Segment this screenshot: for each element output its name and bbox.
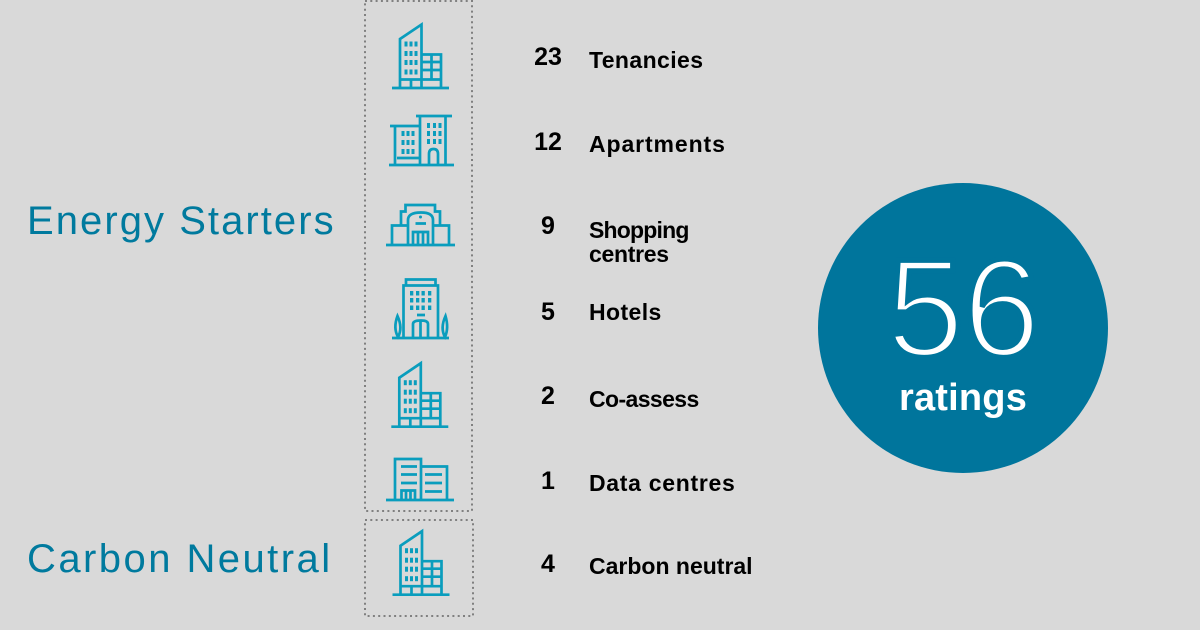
total number: 56 [887, 231, 1039, 386]
heading: Carbon Neutral: Carbon Neutral [27, 537, 333, 581]
stat: 4 Carbon neutral: 4 [541, 550, 555, 578]
stat: 23 Tenancies: Tenancies [589, 47, 703, 73]
stat: 9 Shopping centres [541, 212, 689, 267]
total label: ratings [899, 377, 1027, 419]
stat: 23 Tenancies: 23 [534, 43, 562, 71]
stat: 12 Apartments: 12 [534, 128, 562, 156]
dotted box: Energy Starters [365, 1, 472, 511]
stat: 2 Co-assess: 2 [541, 382, 555, 410]
stat: 9 Shopping centres: centres [589, 241, 669, 267]
stat: 4 Carbon neutral [541, 550, 753, 579]
icon: tenancies building [392, 24, 449, 88]
stat: 5 Hotels: Hotels [589, 299, 662, 325]
heading: Energy Starters: Energy Starters [27, 199, 336, 243]
icon: carbon neutral building [392, 531, 450, 595]
stat: 4 Carbon neutral: Carbon neutral [589, 553, 753, 579]
dotted box: Carbon Neutral [365, 520, 473, 616]
stat: 5 Hotels: 5 [541, 298, 555, 326]
stat: 2 Co-assess: Co-assess [589, 386, 699, 412]
total circle: 56 ratings [818, 183, 1108, 473]
icon: apartments building [389, 116, 454, 165]
stat: 9 Shopping centres: 9 [541, 212, 555, 240]
icon: co-assess building [391, 363, 448, 427]
stat: 5 Hotels [541, 298, 662, 326]
stat: 9 Shopping centres: Shopping [589, 217, 689, 243]
icon: hotel [392, 280, 449, 338]
stat: 1 Data centres [541, 467, 735, 496]
stat: 2 Co-assess [541, 382, 699, 412]
icon: data centre [386, 459, 454, 500]
icon: shopping centre [386, 205, 455, 245]
stat: 23 Tenancies [534, 43, 703, 73]
stat: 12 Apartments [534, 128, 726, 157]
stat: 1 Data centres: 1 [541, 467, 555, 495]
stat: 12 Apartments: Apartments [589, 131, 726, 157]
stat: 1 Data centres: Data centres [589, 470, 735, 496]
